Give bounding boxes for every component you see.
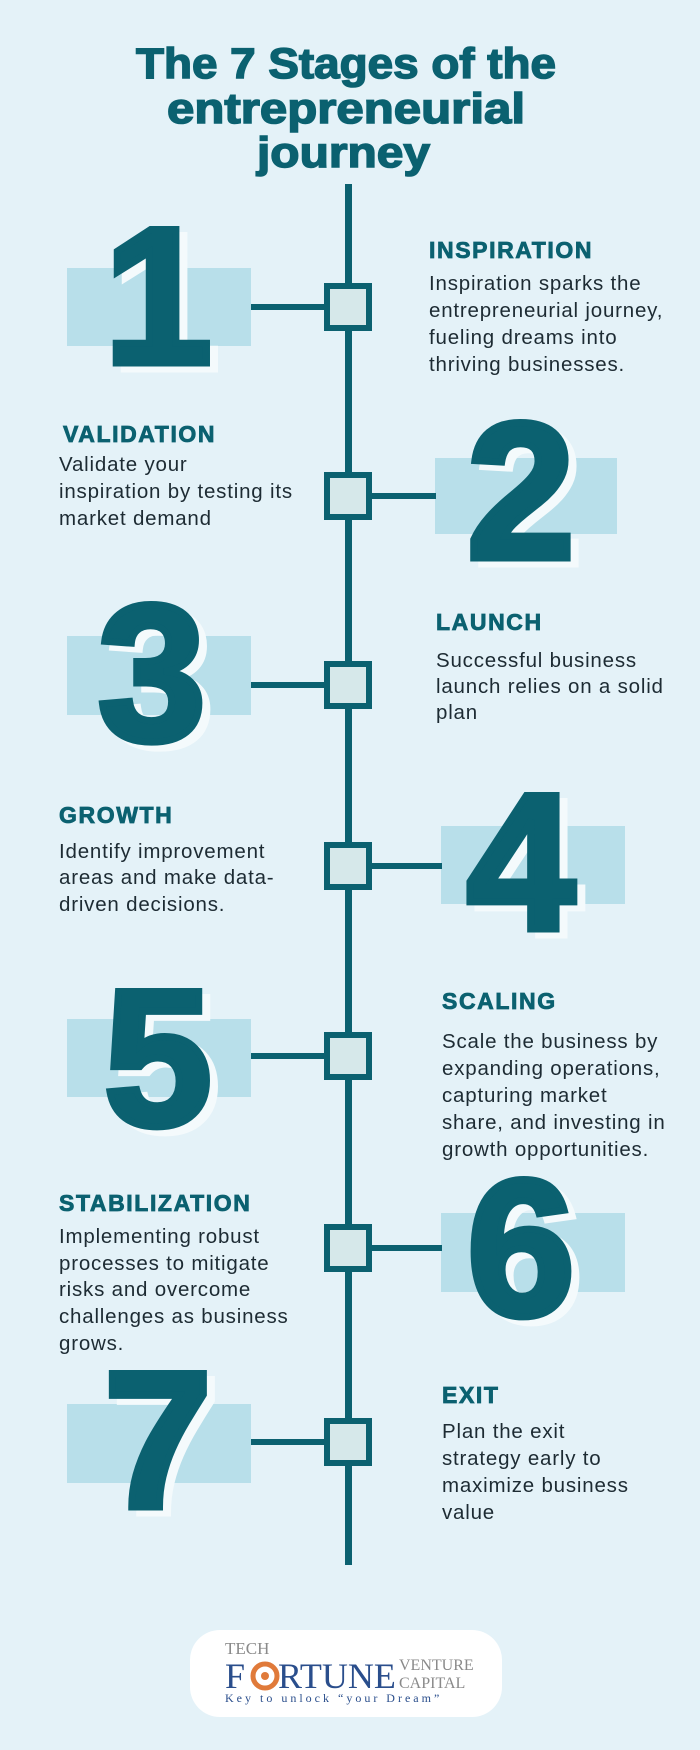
stage 6: 6 [467,1140,575,1357]
stage 2: 2 [467,383,575,600]
stage 1: Inspiration sparks the [429,272,641,295]
stage 4: driven decisions. [59,893,225,916]
stage 1 [67,188,663,411]
stage 5: SCALING [442,988,557,1014]
stage 6: Implementing robust [59,1225,260,1248]
stage 1: 1 [112,194,220,411]
stage 1: INSPIRATION [429,237,593,263]
stage 5: Scale the business by [442,1030,658,1053]
stage 4: Identify improvement [59,840,265,863]
stage 6: STABILIZATION [59,1190,251,1216]
stage 5 [67,950,666,1173]
stage 7: 7 [112,1338,220,1555]
stage 6 [59,1140,625,1363]
stage 7: strategy early to [442,1447,601,1470]
logo: Key to unlock “your Dream” [225,1691,442,1705]
stage 5: 5 [104,950,212,1167]
stage 1: entrepreneurial journey, [429,299,663,322]
stage 1: thriving businesses. [429,353,625,376]
stage 4: 4 [467,754,575,971]
stage 4: 4 [475,760,583,977]
stage 2: 2 [475,389,583,606]
title: entrepreneurial [167,85,525,133]
stage 6: processes to mitigate [59,1252,270,1275]
stage 1: 1 [104,188,212,405]
stage 7: maximize business [442,1474,629,1497]
logo: RTUNE [278,1656,396,1696]
stage 3: launch relies on a solid [436,675,664,698]
stage 2: inspiration by testing its [59,480,293,503]
stage 4: GROWTH [59,802,173,828]
stage 5: capturing market [442,1084,607,1107]
title [136,40,556,177]
stage 3: Successful business [436,649,637,672]
logo [190,1630,502,1717]
stage 6: risks and overcome [59,1278,251,1301]
stage 6: 6 [475,1146,583,1363]
stage 7: value [442,1501,495,1524]
timeline line [345,184,352,1565]
stage 3: plan [436,701,478,724]
stage 7 [67,1332,629,1555]
stage 5: growth opportunities. [442,1138,649,1161]
stage 2 [59,383,617,606]
stage 4 [59,754,625,977]
stage 2: Validate your [59,453,188,476]
stage 7: EXIT [442,1382,500,1408]
logo: F [225,1656,245,1696]
stage 3 [67,565,664,788]
stage 5: expanding operations, [442,1057,661,1080]
icon: swirl O [253,1664,277,1688]
stage 3: 3 [98,565,206,782]
stage 7: Plan the exit [442,1420,565,1443]
logo: TECH [225,1639,269,1658]
stage 2: market demand [59,507,212,530]
logo: CAPITAL [399,1675,465,1692]
stage 1: fueling dreams into [429,326,617,349]
stage 7: 7 [104,1332,212,1549]
stage 5: 5 [112,956,220,1173]
title: The 7 Stages of the [136,40,556,88]
stage 5: share, and investing in [442,1111,666,1134]
stage 4: areas and make data- [59,866,274,889]
stage 3: LAUNCH [436,609,543,635]
stage 2: VALIDATION [63,421,216,447]
stage 6: grows. [59,1332,124,1355]
stage 6: challenges as business [59,1305,289,1328]
logo: VENTURE [399,1657,474,1674]
stage 3: 3 [106,571,214,788]
title: journey [256,129,430,177]
